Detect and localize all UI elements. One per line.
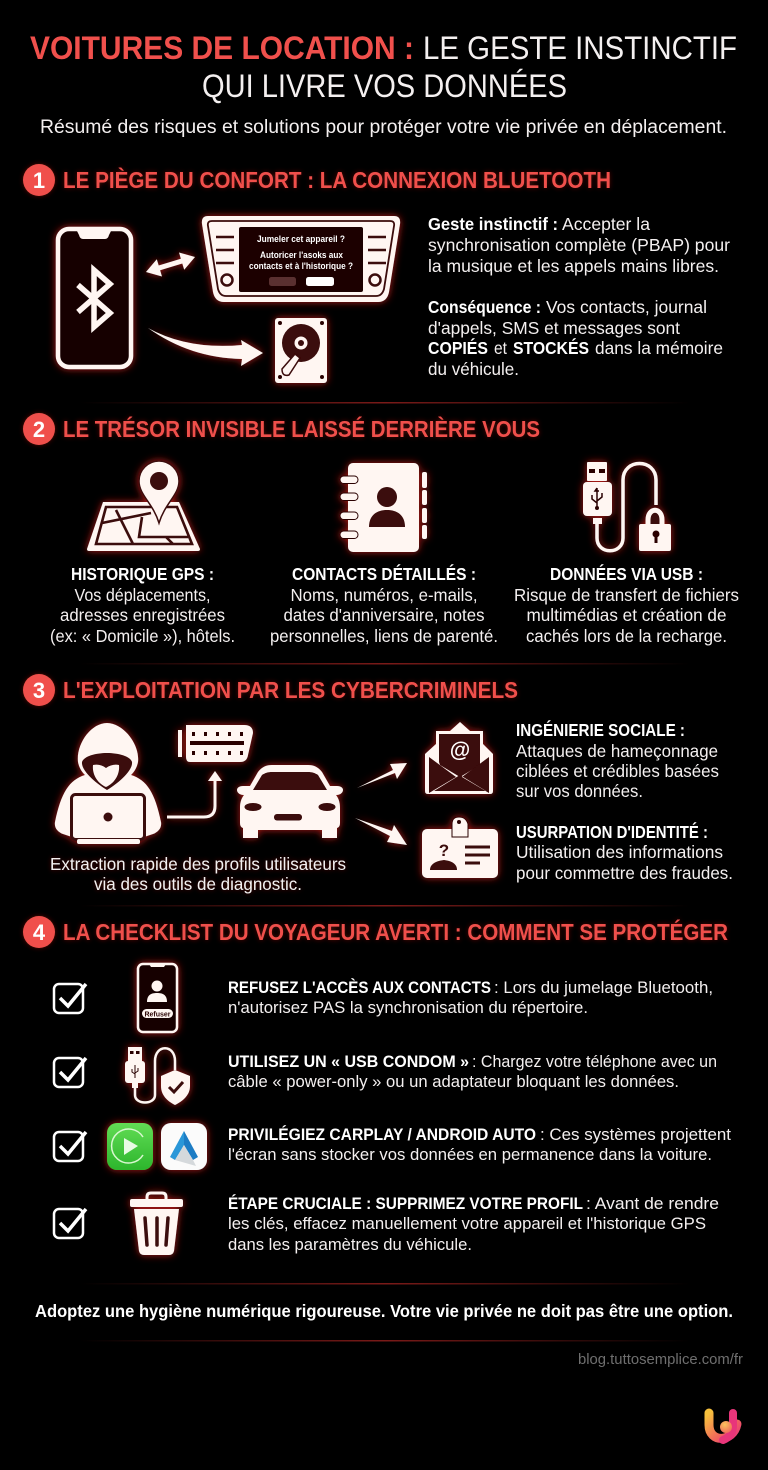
text block: detailed contacts: CONTACTS DÉTAILLÉS :	[292, 563, 476, 584]
text block: detailed contacts	[270, 563, 498, 646]
text block: social engineering: sur vos données.	[516, 781, 643, 801]
title	[30, 30, 737, 104]
text block: delete profile: les clés, effacez manuellement votre appareil et l'historique GPS	[228, 1215, 706, 1233]
icon: identity card: ?	[439, 841, 449, 860]
icon: address book	[340, 463, 427, 552]
heading: section 2	[23, 413, 540, 445]
text block: GPS history: (ex: « Domicile »), hôtels.	[50, 626, 235, 646]
text block: USB condom	[228, 1053, 717, 1091]
text block: GPS history: Vos déplacements,	[74, 585, 210, 605]
heading: section 3: L'EXPLOITATION PAR LES CYBERCRIMINELS	[63, 677, 518, 703]
radio screen text	[249, 234, 353, 286]
arrow: car to identity	[355, 818, 407, 845]
icon: hard disk	[275, 318, 327, 383]
text block: delete profile: : Avant de rendre	[586, 1195, 719, 1213]
icon: logo	[709, 1413, 737, 1440]
text block: extraction caption: via des outils de diagnostic.	[94, 874, 302, 894]
arrow: phone to car radio	[146, 252, 195, 276]
icon: hacker with laptop	[55, 723, 161, 844]
text block: USB data	[514, 563, 739, 646]
text block: instinctive gesture: synchronisation complète (PBAP) pour	[428, 235, 730, 255]
title: VOITURES DE LOCATION :	[30, 30, 414, 66]
subtitle: Résumé des risques et solutions pour protéger votre vie privée en déplacement.	[40, 117, 727, 138]
text block: detailed contacts: dates d'anniversaire, notes	[284, 605, 485, 625]
text block: identity theft: pour commettre des fraudes.	[516, 863, 733, 883]
icon: car	[237, 765, 343, 838]
text block: extraction caption: Extraction rapide des profils utilisateurs	[50, 854, 346, 874]
text block: consequence: STOCKÉS	[513, 337, 589, 358]
icon: checkbox 3	[54, 1132, 86, 1161]
title: QUI LIVRE VOS DONNÉES	[202, 68, 567, 104]
icon: CarPlay	[107, 1123, 153, 1170]
icon: smartphone with bluetooth	[58, 229, 131, 367]
icon: phone refuse: Refuser	[144, 1012, 171, 1018]
text block: instinctive gesture	[428, 214, 730, 276]
text block: instinctive gesture: Geste instinctif :	[428, 214, 558, 234]
footer statement: Adoptez une hygiène numérique rigoureuse. Votre vie privée ne doit pas être une option.	[35, 1301, 733, 1321]
heading: section 3: 3	[33, 678, 45, 703]
text block: social engineering: ciblées et crédibles basées	[516, 761, 719, 781]
heading: section 2: 2	[33, 417, 45, 442]
icon: identity card	[422, 817, 498, 878]
heading: section 4: 4	[33, 920, 46, 945]
text block: delete profile	[228, 1194, 719, 1254]
text block: CarPlay Android Auto: PRIVILÉGIEZ CARPLAY / ANDROID AUTO	[228, 1125, 536, 1144]
icon: checkbox 1	[54, 984, 86, 1013]
text block: USB condom: câble « power-only » ou un adaptateur bloquant les données.	[228, 1073, 679, 1091]
text block: identity theft: USURPATION D'IDENTITÉ :	[516, 821, 708, 842]
panel: section 3 exploitation	[23, 674, 733, 894]
panel: section 1 bluetooth	[23, 164, 730, 383]
heading: section 1: LE PIÈGE DU CONFORT : LA CONNEXION BLUETOOTH	[63, 166, 611, 193]
heading: section 2: LE TRÉSOR INVISIBLE LAISSÉ DERRIÈRE VOUS	[63, 415, 540, 442]
icon: checkbox 2	[54, 1058, 86, 1087]
text block: consequence: d'appels, SMS et messages sont	[428, 318, 680, 338]
text block: consequence: dans la mémoire	[595, 338, 723, 358]
text block: social engineering	[516, 719, 719, 801]
icon: USB with lock	[583, 462, 671, 551]
radio screen text: Autoricer l'asoks aux	[260, 250, 344, 261]
text block: identity theft: Utilisation des informations	[516, 842, 723, 862]
text block: identity theft	[516, 821, 733, 883]
radio screen text: contacts et à l'historique ?	[249, 261, 353, 272]
heading: section 1	[23, 164, 611, 196]
text block: social engineering: INGÉNIERIE SOCIALE :	[516, 719, 685, 740]
text block: GPS history	[50, 564, 235, 646]
icon: checkbox 4	[54, 1209, 86, 1238]
icon: email envelope	[425, 722, 493, 794]
arrow: phone to hard disk	[148, 328, 263, 366]
icon: GPS map	[87, 461, 200, 551]
text block: consequence: COPIÉS	[428, 337, 488, 358]
text block: detailed contacts: Noms, numéros, e-mails,	[290, 585, 478, 605]
panel: section 2 invisible treasure	[23, 413, 739, 646]
radio screen text: Jumeler cet appareil ?	[257, 234, 345, 245]
text block: CarPlay Android Auto: l'écran sans stocker vos données en permanence dans la voiture.	[228, 1146, 712, 1164]
heading: section 1: 1	[33, 168, 45, 193]
text block: consequence: Conséquence :	[428, 297, 541, 317]
text block: USB data: cachés lors de la recharge.	[526, 626, 727, 646]
text block: refuse contacts	[228, 978, 713, 1017]
text block: consequence	[428, 297, 723, 379]
text block: refuse contacts: : Lors du jumelage Bluetooth,	[494, 979, 713, 997]
title: LE GESTE INSTINCTIF	[423, 30, 737, 66]
text block: GPS history: adresses enregistrées	[60, 605, 225, 625]
text block: instinctive gesture: Accepter la	[562, 214, 650, 234]
source url: blog.tuttosemplice.com/fr	[578, 1352, 743, 1368]
text block: USB condom: UTILISEZ UN « USB CONDOM »	[228, 1053, 469, 1071]
text block: refuse contacts: n'autorisez PAS la synchronisation du répertoire.	[228, 999, 588, 1017]
text block: consequence: et	[494, 338, 507, 358]
text block: consequence: du véhicule.	[428, 359, 519, 379]
icon: phone refuse	[138, 964, 177, 1032]
text block: extraction caption	[50, 854, 346, 894]
text block: GPS history: HISTORIQUE GPS :	[71, 564, 214, 584]
text block: detailed contacts: personnelles, liens de parenté.	[270, 626, 498, 646]
text block: refuse contacts: REFUSEZ L'ACCÈS AUX CONTACTS	[228, 978, 491, 997]
text block: instinctive gesture: la musique et les appels mains libres.	[428, 256, 719, 276]
icon: car radio	[202, 216, 400, 302]
text block: USB data: multimédias et création de	[526, 605, 726, 625]
text block: USB data: Risque de transfert de fichiers	[514, 585, 739, 605]
text block: USB data: DONNÉES VIA USB :	[550, 563, 703, 584]
icon: email envelope: @	[450, 739, 470, 762]
icon: Android Auto	[161, 1123, 207, 1170]
text block: delete profile: ÉTAPE CRUCIALE : SUPPRIMEZ VOTRE PROFIL	[228, 1194, 583, 1213]
icon: USB with shield	[125, 1047, 190, 1105]
text block: USB condom: : Chargez votre téléphone avec un	[472, 1053, 717, 1071]
heading: section 3	[23, 674, 518, 706]
text block: consequence: Vos contacts, journal	[546, 297, 707, 317]
text block: social engineering: Attaques de hameçonnage	[516, 741, 718, 761]
panel: section 4 checklist	[23, 916, 731, 1255]
text block: CarPlay Android Auto	[228, 1125, 731, 1164]
arrow: hacker to OBD	[167, 771, 222, 817]
icon: trash bin	[130, 1193, 183, 1255]
icon: OBD connector	[178, 725, 253, 762]
text block: CarPlay Android Auto: : Ces systèmes projettent	[540, 1126, 731, 1144]
arrow: car to email	[357, 763, 407, 788]
text block: delete profile: dans les paramètres du véhicule.	[228, 1236, 472, 1254]
